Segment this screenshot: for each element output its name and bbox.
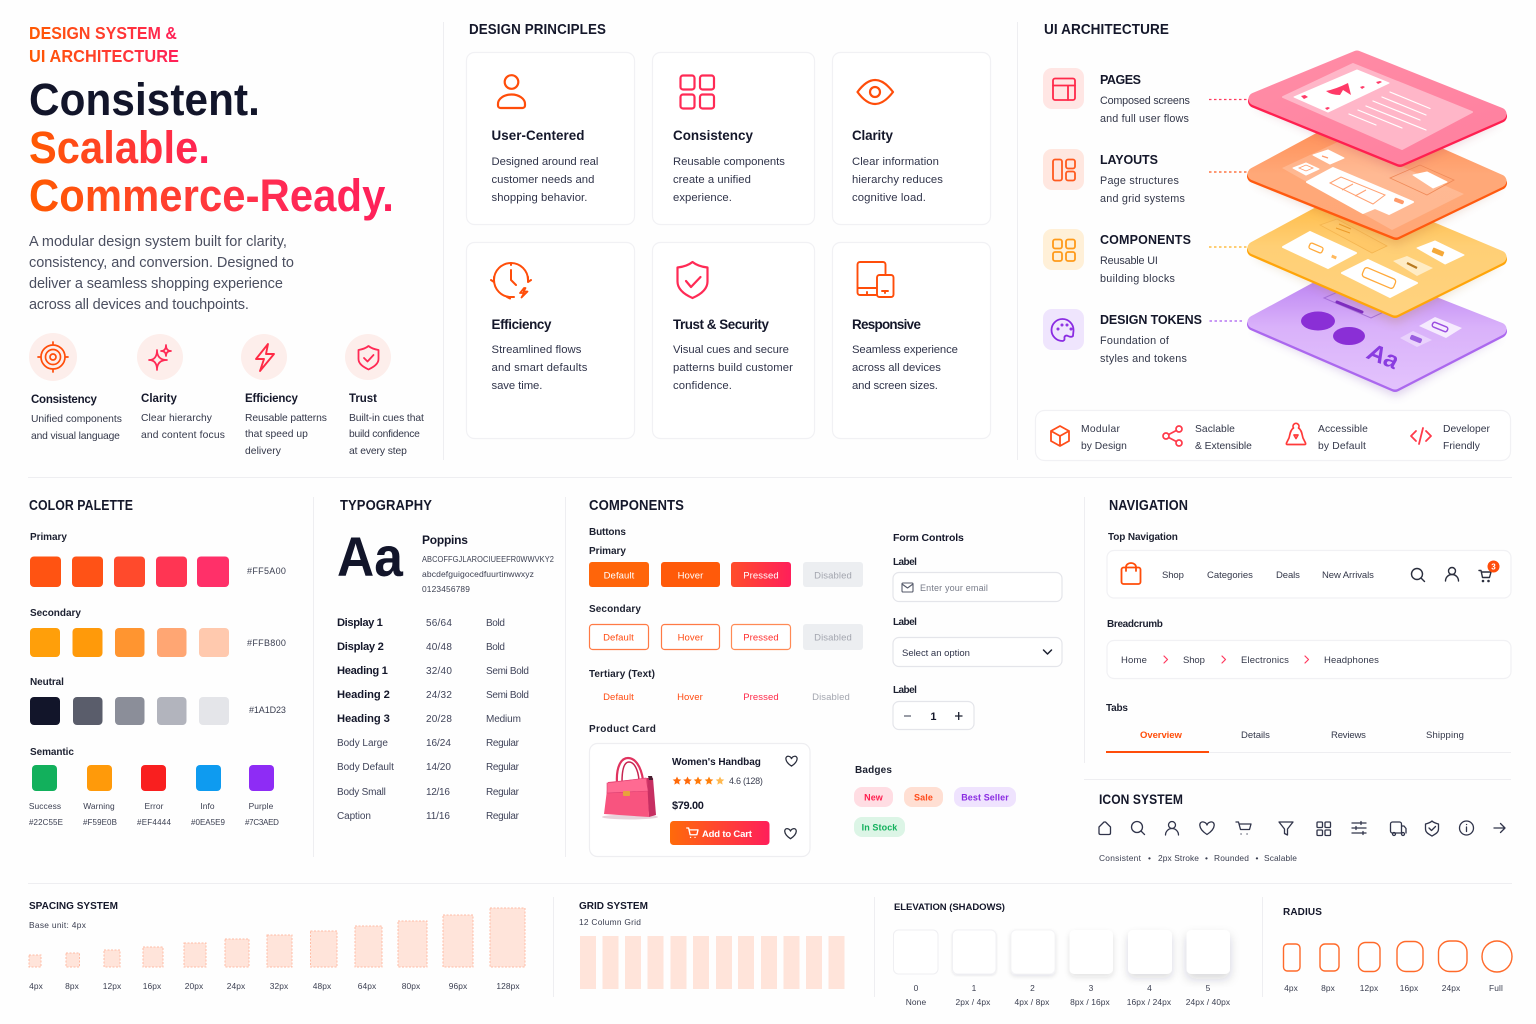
type specimen: 0123456789 [422, 584, 470, 594]
connector: tokens [1210, 320, 1244, 322]
tabs: Overview [1140, 730, 1182, 741]
elevation labels: 5 [1206, 983, 1211, 993]
benefit: modular: by Design [1081, 441, 1127, 452]
type scale table: Body Small [337, 787, 386, 798]
elevation labels: 3 [1089, 983, 1094, 993]
feature: efficiency: Reusable patterns [245, 413, 327, 424]
elevation labels: 2px / 4px [956, 997, 991, 1007]
semantic swatches: #7C3AED [245, 818, 279, 827]
top navigation [1107, 532, 1511, 598]
connector: components [1209, 246, 1248, 248]
product card [589, 724, 810, 856]
semantic swatches: Error [144, 801, 164, 811]
elevation labels: 4 [1147, 983, 1152, 993]
heading: COLOR PALETTE [29, 498, 133, 514]
benefit: accessible: Accessible [1318, 424, 1368, 435]
form controls: Label [893, 557, 917, 568]
layer: components: building blocks [1100, 273, 1176, 285]
benefit: modular [1051, 424, 1127, 452]
tabs: Tabs [1106, 703, 1128, 714]
card: consistency: Reusable components [673, 156, 785, 168]
benefit: modular: Modular [1081, 424, 1120, 435]
card: user-centered [466, 52, 634, 224]
badges: Sale [914, 792, 933, 802]
benefits strip [1036, 410, 1510, 460]
layer: pages: Composed screens [1100, 95, 1190, 107]
radius labels: Full [1489, 983, 1503, 993]
layer: pages: and full user flows [1100, 113, 1190, 125]
type scale table: 40/48 [426, 642, 452, 653]
secondary buttons: Disabled [814, 632, 852, 644]
radius labels: 12px [1360, 983, 1379, 993]
card: clarity: Clarity [852, 128, 893, 143]
elevation labels: 0 [914, 983, 919, 993]
spacing labels: 24px [227, 981, 246, 991]
top navigation: 3 [1491, 562, 1496, 572]
neutral swatches: Neutral [30, 677, 64, 688]
layer: design tokens [1043, 309, 1202, 365]
feature: efficiency [241, 334, 327, 457]
secondary swatches [30, 608, 286, 657]
breadcrumb: Electronics [1241, 655, 1289, 666]
type scale table: Bold [486, 642, 505, 653]
secondary buttons: Pressed [743, 632, 779, 644]
panel: color palette [29, 498, 286, 827]
tertiary buttons: Disabled [812, 692, 850, 703]
card: responsive: Responsive [852, 317, 921, 332]
semantic swatches [29, 747, 279, 827]
feature: efficiency: delivery [245, 446, 282, 457]
top navigation: Shop [1162, 570, 1184, 581]
feature: trust: Built-in cues that [349, 413, 424, 424]
card: clarity: cognitive load. [852, 192, 926, 204]
icon system traits: • [1255, 853, 1259, 863]
type scale table: Bold [486, 618, 505, 629]
benefit: scalable: Saclable [1195, 424, 1235, 435]
elevation labels [906, 983, 1231, 1007]
icon system traits: 2px Stroke [1158, 853, 1199, 863]
tabs [1106, 703, 1511, 753]
layer: layouts: LAYOUTS [1100, 153, 1158, 167]
icon row [1099, 821, 1505, 836]
card: responsive: and screen sizes. [852, 380, 938, 392]
form controls: Select an option [902, 648, 970, 659]
type scale table: Regular [486, 738, 520, 749]
plate: components [1254, 195, 1500, 324]
card: efficiency: Streamlined flows [492, 344, 582, 356]
type scale table: 14/20 [426, 762, 451, 773]
base unit note: Base unit: 4px [29, 920, 87, 930]
product card: 4.6 (128) [729, 776, 763, 786]
card: trust and security: Trust & Security [673, 317, 769, 332]
form controls: Form Controls [893, 532, 964, 544]
card: consistency: experience. [673, 192, 732, 204]
spacing labels: 4px [29, 981, 44, 991]
semantic swatches: #F59E0B [83, 818, 117, 827]
heading: SPACING SYSTEM [29, 901, 118, 912]
card: trust and security: patterns build customer [673, 362, 793, 374]
benefit: developer: Friendly [1443, 441, 1481, 452]
feature: clarity: and content focus [141, 430, 225, 441]
feature: trust [345, 334, 424, 457]
form controls [893, 532, 1062, 730]
layer: layouts: and grid systems [1100, 193, 1186, 205]
type scale table: 12/16 [426, 787, 450, 798]
form controls: 1 [930, 711, 937, 723]
type scale table: Semi Bold [486, 690, 529, 701]
type scale table: Display 1 [337, 617, 383, 629]
semantic swatches: Success [29, 801, 61, 811]
benefit: accessible [1286, 423, 1368, 452]
badges: In Stock [862, 822, 898, 832]
card: clarity: hierarchy reduces [852, 174, 943, 186]
intro paragraph: A modular design system built for clarity, [29, 234, 287, 250]
heading: TYPOGRAPHY [340, 498, 432, 514]
feature: consistency: Unified components [31, 414, 122, 425]
radius labels: 24px [1442, 983, 1461, 993]
panel: icon system [1099, 792, 1505, 863]
icon system traits [1099, 853, 1297, 863]
eyebrow title: UI ARCHITECTURE [29, 46, 179, 66]
plate: pages [1255, 57, 1500, 172]
panel: typography [337, 498, 554, 822]
elevation labels: 2 [1030, 983, 1035, 993]
spacing labels: 16px [143, 981, 162, 991]
layer: design tokens: DESIGN TOKENS [1100, 313, 1202, 327]
feature: trust: build confidence [349, 429, 420, 440]
feature: consistency: and visual language [31, 431, 120, 442]
feature: efficiency: that speed up [245, 429, 308, 440]
heading: DESIGN PRINCIPLES [469, 22, 606, 38]
spacing labels: 12px [103, 981, 122, 991]
spacing labels: 64px [358, 981, 377, 991]
type specimen: Aa [337, 525, 404, 588]
grid note: 12 Column Grid [579, 917, 641, 927]
breadcrumb [1107, 619, 1511, 678]
type scale table: Regular [486, 787, 520, 798]
heading: ICON SYSTEM [1099, 792, 1183, 807]
secondary buttons [589, 604, 863, 650]
semantic swatches: #EF4444 [137, 818, 171, 827]
card: trust and security: confidence. [673, 380, 732, 392]
icon system traits: • [1148, 853, 1151, 863]
layer: design tokens: styles and tokens [1100, 353, 1188, 365]
type scale table: 32/40 [426, 666, 452, 677]
type scale table: Display 2 [337, 641, 384, 653]
main headline: Scalable. [29, 122, 210, 173]
type scale table: Body Large [337, 738, 388, 749]
form controls: Label [893, 617, 917, 628]
semantic swatches: Semantic [30, 747, 74, 758]
spacing labels: 32px [270, 981, 289, 991]
spacing labels: 8px [65, 981, 80, 991]
feature: consistency [29, 333, 122, 442]
panel: ui architecture [1036, 22, 1510, 460]
type specimen: ABCOFFGJLAROCIUEEFR0WWVKY2 [422, 554, 554, 564]
eyebrow title [29, 23, 179, 66]
radius shapes [1284, 941, 1512, 972]
semantic swatches: Purple [249, 801, 274, 811]
top navigation: New Arrivals [1322, 570, 1374, 581]
icon system traits: Scalable [1264, 853, 1297, 863]
card: efficiency: Efficiency [492, 317, 552, 332]
layer: layouts: Page structures [1100, 175, 1180, 187]
layer: pages [1043, 68, 1190, 125]
spacing labels [29, 981, 520, 991]
icon: heart outline [786, 756, 797, 766]
breadcrumb: Shop [1183, 655, 1205, 666]
card: responsive [832, 242, 990, 438]
elevation labels: 1 [972, 983, 977, 993]
card: responsive: Seamless experience [852, 344, 958, 356]
panel: design principles [466, 22, 990, 438]
tertiary buttons: Default [603, 692, 634, 703]
secondary buttons: Hover [678, 632, 703, 644]
panel: components [589, 498, 1062, 856]
feature: trust: at every step [349, 446, 407, 457]
elevation labels: 8px / 16px [1070, 997, 1111, 1007]
form controls: Enter your email [920, 583, 988, 593]
tertiary buttons: Hover [677, 692, 703, 703]
icon system traits: • [1205, 853, 1208, 863]
elevation labels: 16px / 24px [1127, 997, 1172, 1007]
feature: clarity: Clear hierarchy [141, 413, 213, 424]
semantic swatches: #22C55E [29, 818, 63, 827]
benefit: developer: Developer [1443, 424, 1490, 435]
card: user-centered: Designed around real [492, 156, 598, 168]
type scale table: Regular [486, 811, 520, 822]
elevation labels: 4px / 8px [1015, 997, 1050, 1007]
primary buttons [589, 527, 863, 587]
card: responsive: across all devices [852, 362, 941, 374]
card: consistency: create a unified [673, 174, 751, 186]
type specimen: abcdefguigocedfuurtinwwxyz [422, 569, 534, 579]
card: clarity [832, 52, 990, 224]
plate: layouts [1254, 118, 1500, 246]
spacing labels: 80px [402, 981, 421, 991]
type scale table: Heading 2 [337, 689, 390, 701]
type scale table: 11/16 [426, 811, 450, 822]
card: user-centered: customer needs and [492, 174, 594, 186]
type scale table: Caption [337, 811, 371, 822]
add to cart button [670, 821, 770, 845]
benefit: developer [1411, 424, 1490, 452]
type scale table: Heading 3 [337, 713, 390, 725]
top navigation: Categories [1207, 570, 1253, 581]
semantic swatches: #0EA5E9 [191, 818, 225, 827]
benefit: accessible: by Default [1318, 441, 1366, 452]
tertiary buttons: Pressed [743, 692, 779, 703]
semantic swatches: Info [200, 801, 215, 811]
radius labels: 16px [1400, 983, 1419, 993]
primary swatches [30, 532, 286, 587]
plate: tokens [1254, 270, 1500, 396]
form controls: Label [893, 685, 917, 696]
panel: elevation [894, 902, 1231, 1007]
card: user-centered: User-Centered [492, 128, 584, 143]
spacing labels: 128px [496, 981, 520, 991]
main headline: Commerce-Ready. [29, 170, 394, 221]
heading: ELEVATION (SHADOWS) [894, 902, 1005, 913]
elevation labels: 24px / 40px [1186, 997, 1231, 1007]
neutral swatches [30, 677, 286, 725]
top navigation: Deals [1276, 570, 1300, 581]
feature: clarity: Clarity [141, 393, 178, 405]
badges: Best Seller [961, 792, 1009, 802]
badges [854, 765, 1016, 837]
neutral swatches: #1A1D23 [249, 705, 286, 715]
layer: layouts [1043, 149, 1186, 205]
card: trust and security [652, 242, 814, 438]
card: consistency: Consistency [673, 128, 753, 143]
main headline: Consistent. [29, 74, 260, 125]
layer: components [1043, 229, 1191, 285]
intro paragraph: consistency, and conversion. Designed to [29, 255, 294, 271]
secondary buttons: Secondary [589, 604, 641, 615]
type scale table [337, 617, 529, 822]
feature: consistency: Consistency [31, 394, 98, 406]
type scale table: 24/32 [426, 690, 452, 701]
card: efficiency: save time. [492, 380, 542, 392]
eyebrow title: DESIGN SYSTEM & [29, 23, 177, 43]
panel: hero [29, 23, 424, 457]
intro paragraph: across all devices and touchpoints. [29, 297, 249, 313]
feature: efficiency: Efficiency [245, 393, 298, 405]
card: consistency [652, 52, 814, 224]
benefit: scalable: & Extensible [1195, 441, 1252, 452]
panel: grid system [579, 901, 844, 989]
heading: RADIUS [1283, 907, 1322, 918]
product card: Women's Handbag [672, 757, 761, 768]
isometric stack [1254, 57, 1500, 396]
benefit: scalable [1163, 424, 1252, 452]
badges: Badges [855, 765, 892, 776]
card: efficiency [466, 242, 634, 438]
type scale table: 20/28 [426, 714, 452, 725]
type scale table: Medium [486, 714, 521, 725]
radius labels: 8px [1321, 983, 1336, 993]
type scale table: 16/24 [426, 738, 451, 749]
primary buttons: Pressed [743, 570, 779, 582]
heading: GRID SYSTEM [579, 901, 648, 912]
card: clarity: Clear information [852, 156, 939, 168]
main headline [29, 74, 394, 221]
semantic swatches: Warning [83, 801, 115, 811]
primary buttons: Buttons [589, 527, 626, 538]
heading: UI ARCHITECTURE [1044, 22, 1169, 38]
spacing labels: 48px [313, 981, 332, 991]
primary buttons: Disabled [814, 570, 852, 582]
spacing labels: 20px [185, 981, 204, 991]
breadcrumb: Home [1121, 655, 1147, 666]
primary buttons: Primary [589, 546, 626, 557]
type specimen [337, 525, 554, 594]
secondary swatches: Secondary [30, 608, 81, 619]
plate: tokens: Aa [1363, 338, 1402, 375]
radius labels: 4px [1284, 983, 1299, 993]
connector: pages [1209, 98, 1248, 100]
feature: trust: Trust [349, 393, 377, 405]
type scale table: 56/64 [426, 618, 452, 629]
tertiary buttons: Tertiary (Text) [589, 669, 655, 680]
primary buttons: Hover [678, 570, 703, 582]
radius labels [1284, 983, 1503, 993]
top navigation: Top Navigation [1108, 532, 1178, 543]
add to cart button: Add to Cart [702, 829, 753, 840]
connector: layouts [1209, 171, 1248, 173]
product card: $79.00 [672, 800, 704, 812]
product card: Product Card [589, 724, 656, 735]
type scale table: Regular [486, 762, 520, 773]
layer: components: COMPONENTS [1100, 233, 1191, 247]
breadcrumb: Breadcrumb [1107, 619, 1163, 630]
badges: New [864, 792, 884, 802]
breadcrumb: Headphones [1324, 655, 1379, 666]
icon system traits: Rounded [1214, 853, 1249, 863]
elevation labels: None [906, 997, 926, 1007]
primary buttons: Default [604, 570, 635, 582]
type scale table: Body Default [337, 762, 394, 773]
grid columns [580, 936, 844, 989]
elevation cards [894, 930, 1230, 974]
spacing labels: 96px [449, 981, 468, 991]
intro paragraph [29, 234, 294, 313]
spacing bars [29, 908, 525, 967]
icon system traits: Consistent [1099, 853, 1142, 863]
secondary buttons: Default [603, 632, 634, 644]
tabs: Details [1241, 730, 1270, 741]
panel: navigation [1106, 498, 1511, 753]
primary swatches: #FF5A00 [247, 566, 286, 576]
tabs: Reviews [1331, 730, 1366, 741]
icon: heart outline [785, 829, 796, 839]
layer: design tokens: Foundation of [1100, 335, 1170, 347]
heading: NAVIGATION [1109, 498, 1188, 514]
intro paragraph: deliver a seamless shopping experience [29, 276, 283, 292]
layer: components: Reusable UI [1100, 255, 1158, 267]
rating stars [673, 776, 724, 785]
type scale table: Heading 1 [337, 665, 388, 677]
primary swatches: Primary [30, 532, 67, 543]
card: efficiency: and smart defaults [492, 362, 588, 374]
panel: radius [1283, 907, 1512, 993]
panel: spacing system [29, 901, 525, 991]
heading: COMPONENTS [589, 498, 684, 514]
layer: pages: PAGES [1100, 73, 1141, 87]
tabs: Shipping [1426, 730, 1464, 741]
type specimen: Poppins [422, 533, 468, 547]
feature: clarity [137, 334, 225, 441]
card: trust and security: Visual cues and secure [673, 344, 789, 356]
tertiary buttons [589, 669, 850, 703]
secondary swatches: #FFB800 [247, 638, 286, 648]
icon: handbag [602, 758, 658, 820]
card: user-centered: shopping behavior. [492, 192, 588, 204]
type scale table: Semi Bold [486, 666, 529, 677]
